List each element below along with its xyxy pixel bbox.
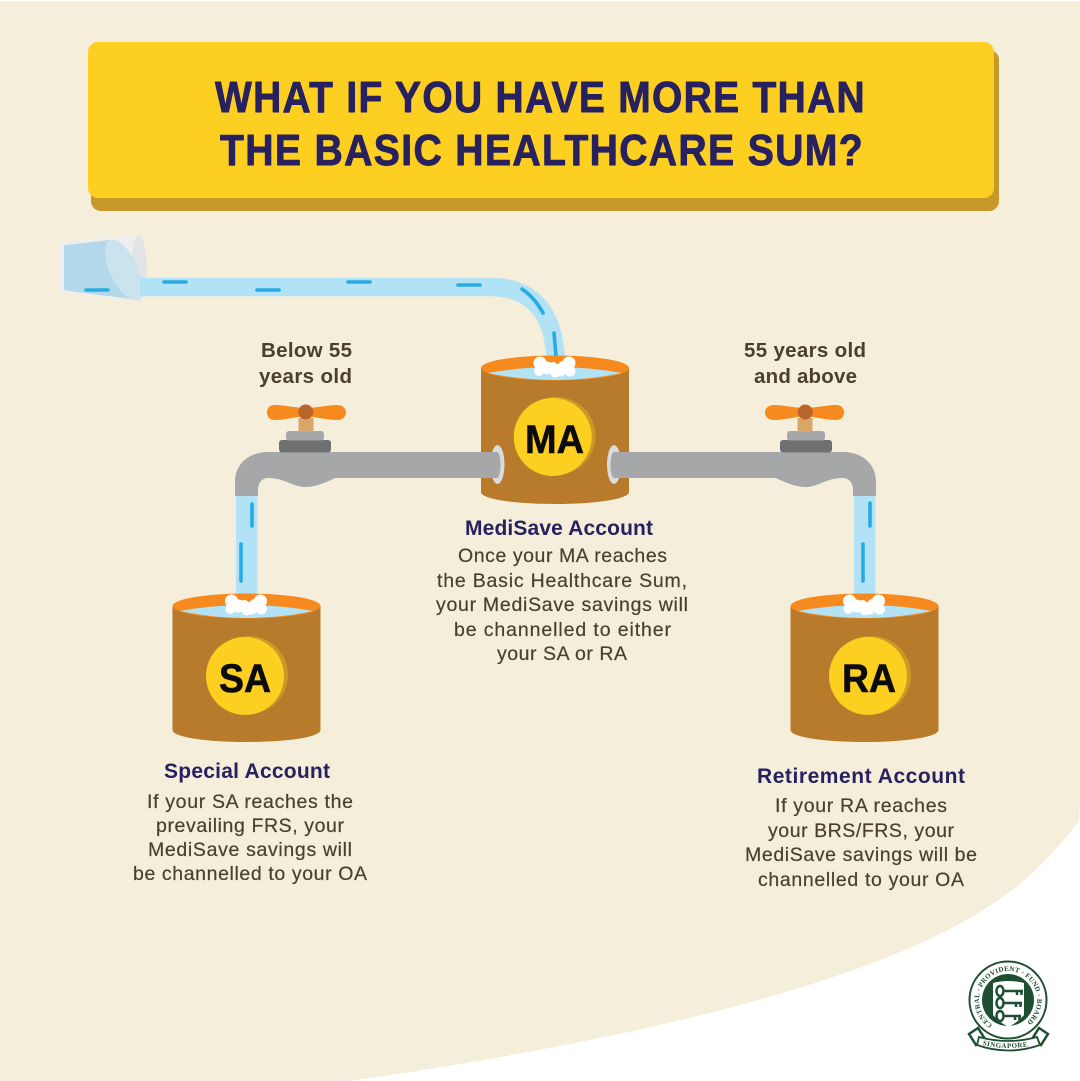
title banner — [88, 42, 999, 211]
title: WHAT IF YOU HAVE MORE THAN — [215, 73, 866, 122]
title — [215, 73, 866, 175]
text block: Retirement Account: your BRS/FRS, your — [768, 820, 954, 842]
badge: SA — [206, 636, 288, 715]
water stream — [140, 287, 556, 362]
text block: MediSave Account — [436, 517, 688, 665]
right faucet — [607, 404, 876, 496]
title: THE BASIC HEALTHCARE SUM? — [220, 126, 864, 175]
label: 55 and above: and above — [754, 365, 857, 388]
shield with keys — [993, 981, 1024, 1027]
text block: Retirement Account: Retirement Account — [757, 765, 965, 788]
logo: CPF Board crest: CENTRAL · PROVIDENT · FUND · BOARD — [974, 966, 1042, 1028]
icon: glass — [60, 234, 151, 306]
MA tank — [481, 356, 629, 504]
text block: Special Account: If your SA reaches the — [147, 791, 353, 813]
text block: MediSave Account: MediSave Account — [465, 517, 653, 540]
badge: RA — [829, 636, 911, 715]
left faucet water — [236, 495, 258, 603]
SA tank — [172, 594, 320, 742]
foam — [225, 594, 267, 616]
text block: MediSave Account: be channelled to either — [454, 619, 672, 641]
text block: Special Account: Special Account — [164, 760, 330, 783]
text block: Retirement Account: channelled to your OA — [758, 869, 964, 891]
badge: SA: SA — [219, 657, 271, 701]
water dashes — [86, 282, 556, 356]
label: 55 and above — [744, 339, 866, 388]
label: below 55: Below 55 — [261, 339, 352, 362]
text block: Special Account: be channelled to your OA — [133, 863, 367, 885]
pouring glass and water stream — [60, 234, 556, 362]
text block: Special Account: prevailing FRS, your — [156, 815, 344, 837]
text block: Retirement Account — [745, 765, 977, 891]
logo: CPF Board crest — [967, 960, 1050, 1052]
badge: MA: MA — [525, 418, 584, 462]
text block: Retirement Account: If your RA reaches — [775, 795, 947, 817]
RA tank — [790, 594, 938, 742]
right faucet water — [854, 495, 876, 603]
text block: MediSave Account: Once your MA reaches — [458, 545, 667, 567]
label: below 55 — [259, 339, 352, 388]
badge: MA — [514, 397, 596, 476]
text block: Special Account — [133, 760, 367, 885]
label: 55 and above: 55 years old — [744, 339, 866, 362]
ribbon: SINGAPORE — [982, 1040, 1028, 1048]
label: below 55: years old — [259, 365, 352, 388]
foam — [843, 594, 885, 616]
foam — [534, 356, 576, 378]
banner face — [88, 42, 994, 198]
text block: Special Account: MediSave savings will — [148, 839, 352, 861]
left faucet — [235, 404, 504, 496]
banner shadow — [91, 50, 999, 211]
text block: MediSave Account: your MediSave savings will — [436, 594, 688, 616]
text block: Retirement Account: MediSave savings will be — [745, 844, 977, 866]
text block: MediSave Account: the Basic Healthcare Sum, — [437, 570, 687, 592]
badge: RA: RA — [842, 657, 896, 701]
text block: MediSave Account: your SA or RA — [497, 643, 627, 665]
